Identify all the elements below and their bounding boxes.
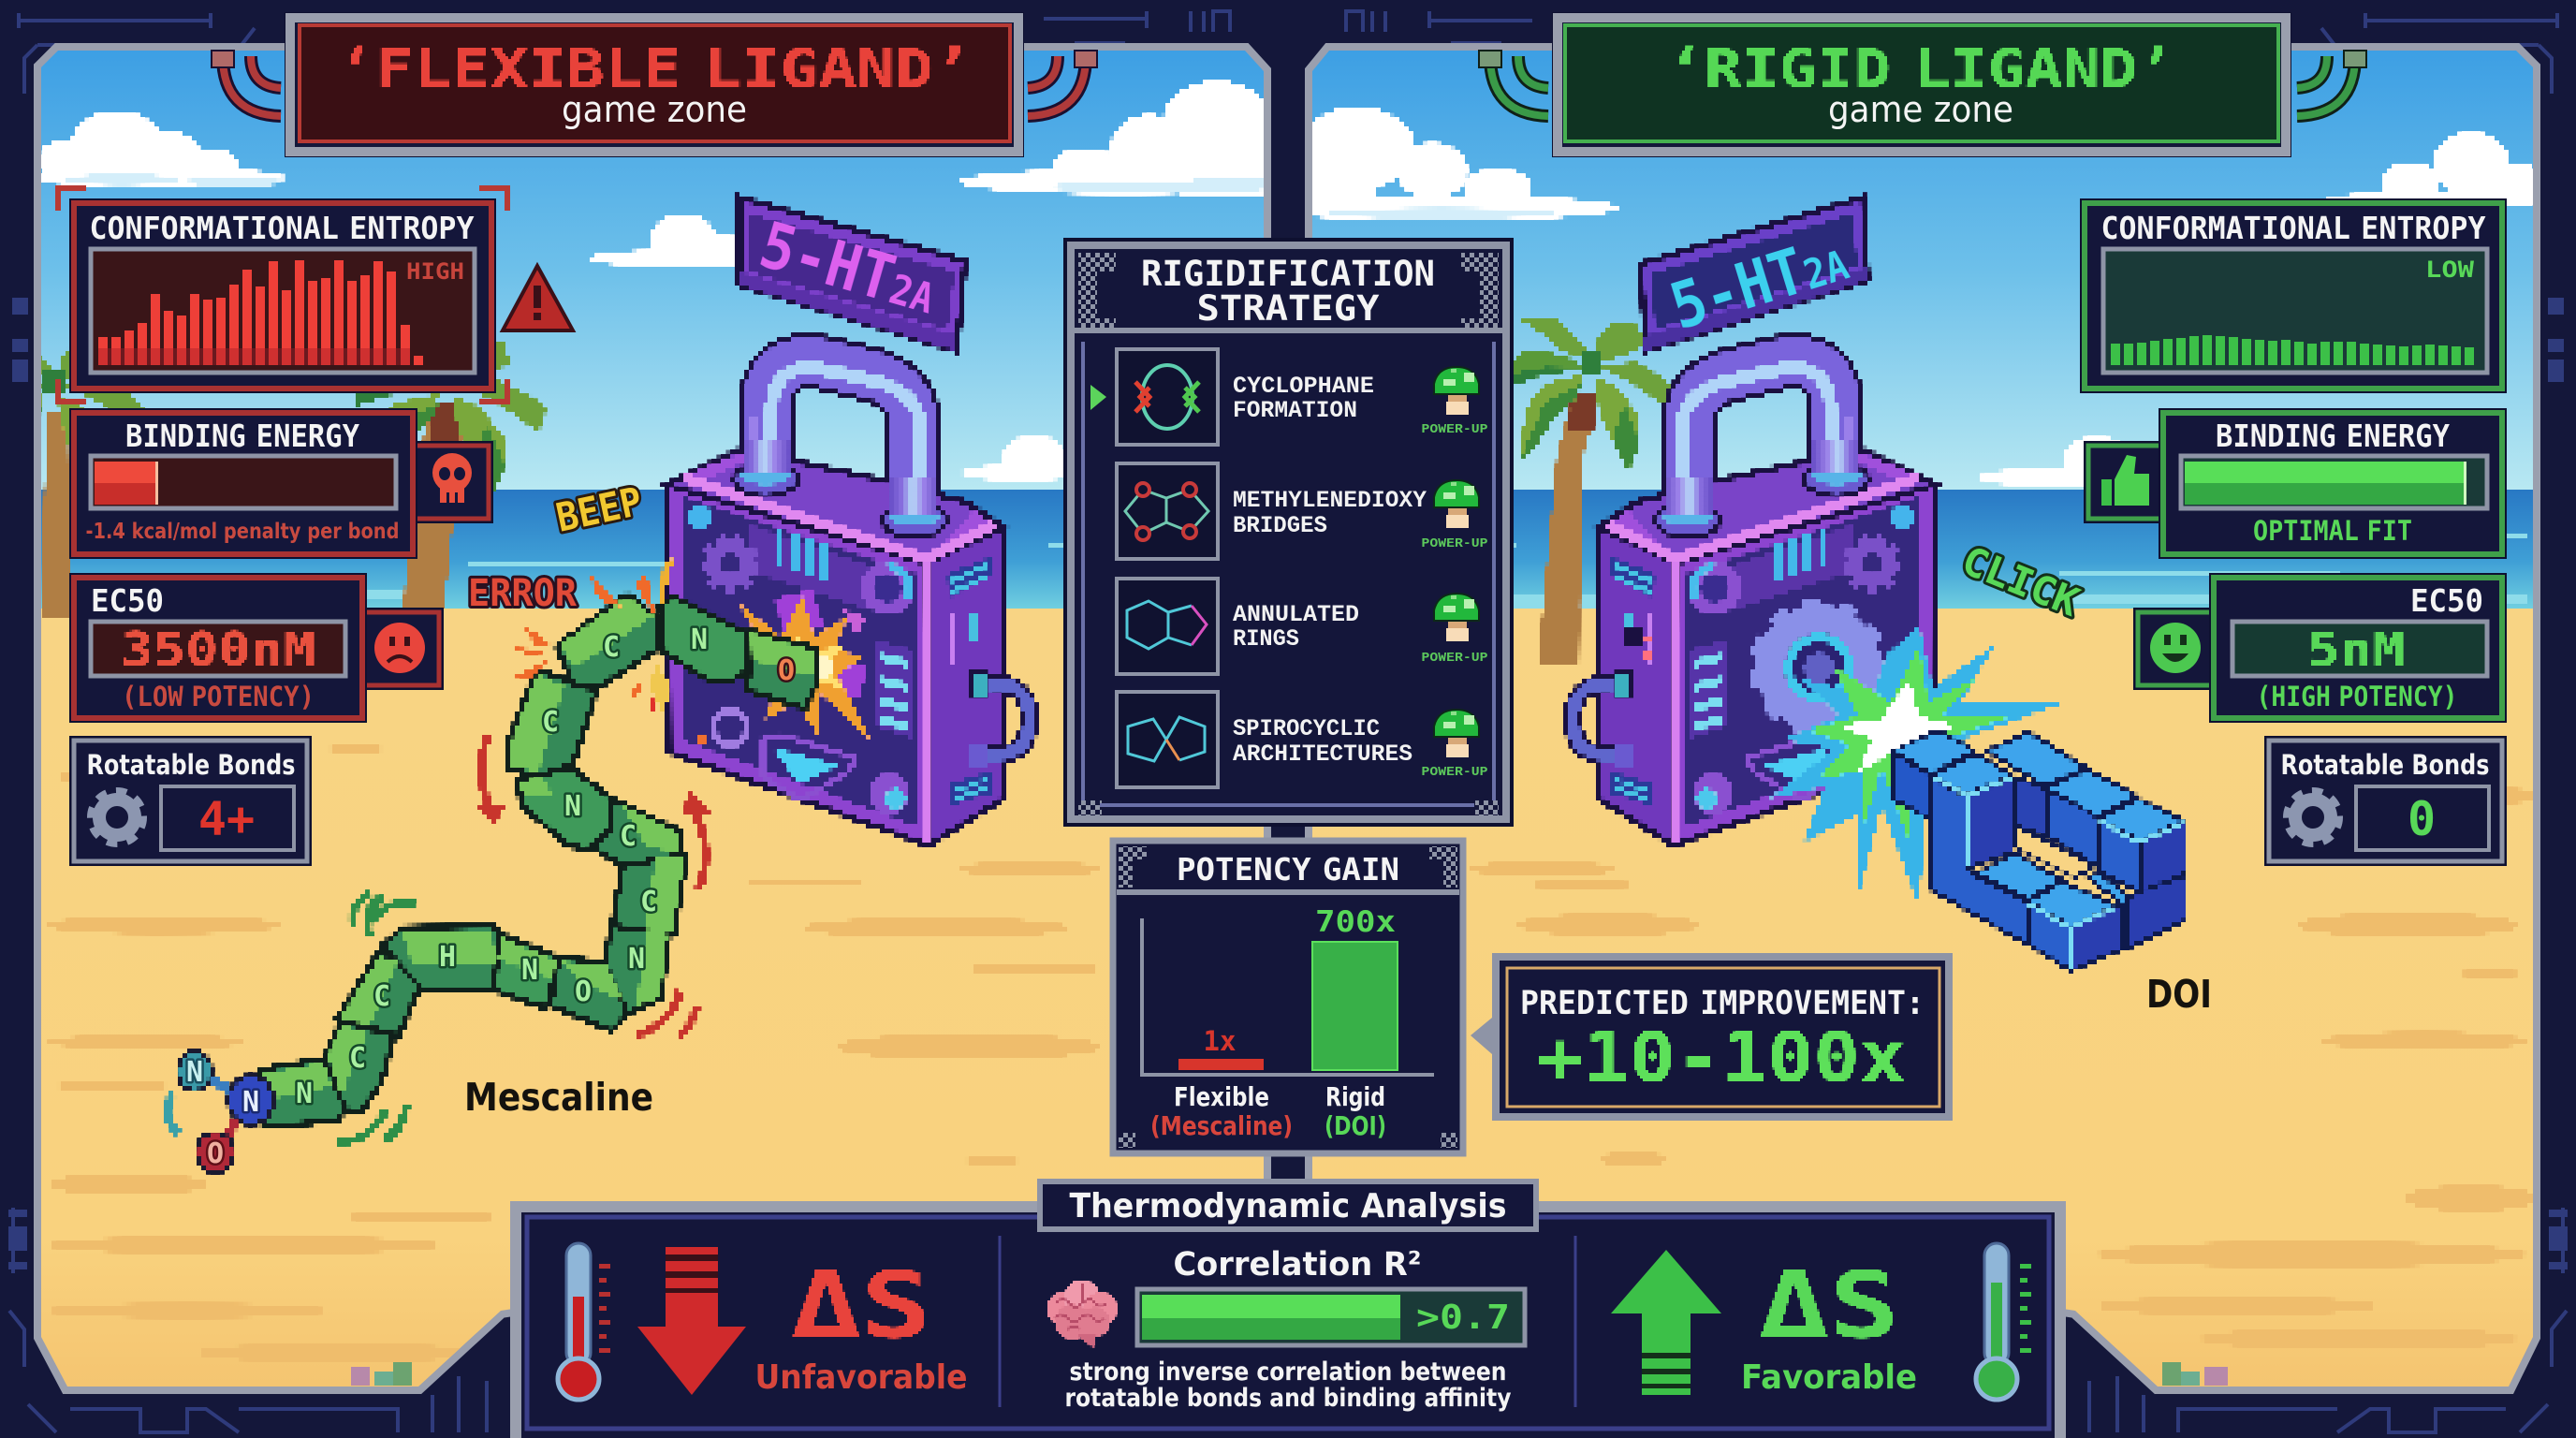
icon: gear [92, 792, 142, 843]
sand streaks [1470, 788, 2537, 1350]
correlation block [1046, 1246, 1525, 1413]
callout: predicted improvement: PREDICTED IMPROVEMENT: [1520, 985, 1925, 1022]
panel: rotatable bonds flexible: 4+ [198, 792, 255, 846]
entropy chart high [91, 249, 475, 373]
entropy chart high: HIGH [406, 258, 464, 285]
cables right header [1479, 51, 2366, 116]
panel: EC50 flexible: EC50 [91, 582, 164, 619]
lock right [1573, 360, 1935, 845]
item: spirocyclic architectures: ARCHITECTURES [1233, 741, 1412, 768]
molecule letters: N [691, 624, 708, 656]
thermometer red [558, 1243, 610, 1400]
flexible title: ‘FLEXIBLE LIGAND’ [337, 38, 972, 100]
icon: warning triangle [503, 266, 573, 330]
icon box: thumbs up [2084, 441, 2167, 523]
molecule letters: O [575, 976, 592, 1008]
sand streaks [47, 744, 1101, 1362]
molecule letters: N [628, 943, 645, 976]
EC50 value rigid [2232, 622, 2487, 677]
item: cyclophane formation: POWER-UP [1421, 422, 1488, 437]
correlation bar: >0.7 [1416, 1299, 1510, 1337]
right window frame [1312, 51, 2533, 1387]
correlation block: Correlation R² [1174, 1246, 1421, 1284]
left window frame [41, 51, 1264, 1387]
clouds right [1264, 107, 2542, 487]
panel: EC50 rigid [2209, 573, 2507, 723]
panel: conformational entropy rigid [2080, 198, 2507, 393]
thermometer green [1976, 1243, 2031, 1400]
panel: binding energy flexible: -1.4 kcal/mol penalty per bond [86, 520, 399, 544]
molecule letters [186, 624, 795, 1170]
entropy chart low [2103, 249, 2487, 373]
item: methylenedioxy bridges: POWER-UP [1421, 536, 1488, 551]
EC50 value flexible [91, 622, 345, 677]
header: rigid ligand [1552, 12, 2291, 157]
selector arrow [1090, 385, 1106, 410]
clouds left [33, 81, 1287, 483]
molecule letters: O [207, 1137, 224, 1170]
item: methylenedioxy bridges [1117, 463, 1488, 559]
entropy up text [1741, 1253, 1917, 1397]
item: annulated rings: RINGS [1233, 625, 1299, 653]
arrow up green [1611, 1250, 1721, 1395]
EC50 value flexible: 3500nM [121, 623, 315, 677]
item: spirocyclic architectures: SPIROCYCLIC [1233, 715, 1380, 742]
flexible subtitle: game zone [562, 89, 747, 130]
molecule letters: N [186, 1056, 203, 1089]
sign text right: 5-HT2A [1662, 222, 1856, 345]
icon box: happy face [2133, 608, 2217, 690]
molecule letters: N [521, 954, 538, 987]
icon: gear rigid [2288, 792, 2338, 843]
strategy heading: STRATEGY [1196, 288, 1380, 329]
item: spirocyclic architectures: POWER-UP [1421, 765, 1488, 780]
item: cyclophane formation [1117, 349, 1488, 445]
sign text left: 5-HT2A [752, 208, 945, 329]
bar chart: potency: (DOI) [1325, 1110, 1386, 1141]
panel: EC50 rigid: EC50 [2410, 582, 2483, 619]
corner blocks left [349, 1363, 414, 1386]
entropy up text: Favorable [1741, 1358, 1917, 1397]
panel: potency gain [1113, 841, 1463, 1153]
gear in lock [1755, 604, 1882, 731]
collision sparks [515, 557, 674, 721]
sea shimmer [41, 522, 1264, 599]
DOI rigid block [1893, 730, 2186, 971]
palm left small [0, 335, 147, 618]
molecule flexible chain [258, 594, 817, 1127]
panel: rotatable bonds rigid: 0 [2408, 792, 2436, 846]
molecule letters: H [439, 941, 456, 974]
molecule letters: C [542, 706, 559, 739]
panel: conformational entropy rigid: CONFORMATIONAL ENTROPY [2100, 210, 2486, 246]
molecule letters: C [603, 631, 620, 664]
BEEP label: BEEP [552, 478, 646, 541]
panel: rotatable bonds flexible: Rotatable Bonds [86, 749, 296, 781]
lock right LEDs [1625, 629, 1650, 660]
ERROR label: ERROR [468, 572, 578, 615]
correlation bar [1137, 1289, 1525, 1345]
panel: rotatable bonds rigid: Rotatable Bonds [2280, 749, 2490, 781]
panel: binding energy rigid: OPTIMAL FIT [2253, 515, 2412, 547]
entropy down text [754, 1253, 968, 1397]
molecule letters: N [296, 1078, 313, 1110]
palm right [1510, 318, 1676, 665]
bar chart: potency: 1x [1204, 1025, 1236, 1057]
icon: brain [1046, 1280, 1118, 1348]
bar chart: potency [1142, 905, 1434, 1141]
panel: conformational entropy flexible [58, 188, 507, 402]
strategy heading [1141, 254, 1435, 329]
panel: EC50 rigid: (HIGH POTENCY) [2256, 681, 2458, 712]
item: methylenedioxy bridges: METHYLENEDIOXY [1233, 487, 1427, 514]
molecule letters: N [242, 1086, 259, 1119]
arrow down red [637, 1247, 746, 1395]
binding bar flexible [91, 456, 396, 508]
correlation block: strong inverse correlation between [1069, 1357, 1507, 1387]
item: annulated rings: ANNULATED [1233, 601, 1359, 628]
molecule letters: O [778, 654, 795, 687]
DOI label: DOI [2146, 972, 2212, 1017]
sign left [739, 198, 965, 351]
panel: EC50 flexible: (LOW POTENCY) [122, 681, 315, 712]
molecule letters: C [349, 1042, 366, 1075]
section title tab: Thermodynamic Analysis [1069, 1187, 1507, 1225]
molecule letters: N [564, 790, 581, 823]
strategy heading: RIGIDIFICATION [1141, 254, 1435, 294]
molecule letters: C [640, 886, 657, 918]
item: cyclophane formation: CYCLOPHANE [1233, 373, 1374, 400]
header: flexible ligand [285, 12, 1024, 157]
panel: binding energy flexible [69, 408, 417, 559]
bar chart: potency: Rigid [1325, 1081, 1385, 1112]
rigid subtitle: game zone [1828, 89, 2013, 130]
left beach scene [0, 51, 1310, 1404]
item: annulated rings: POWER-UP [1421, 651, 1488, 666]
CLICK label: CLICK [1955, 537, 2086, 625]
panel: potency gain: POTENCY GAIN [1177, 851, 1399, 888]
panel: conformational entropy flexible: CONFORMATIONAL ENTROPY [90, 210, 475, 246]
entropy chart low: LOW [2425, 257, 2475, 283]
binding bar rigid [2181, 456, 2487, 508]
panel: EC50 flexible [69, 573, 367, 723]
Mescaline label: Mescaline [464, 1075, 653, 1120]
EC50 value rigid: 5nM [2307, 623, 2405, 677]
item: annulated rings [1117, 579, 1488, 674]
panel: thermodynamic analysis [516, 1181, 2060, 1438]
item: methylenedioxy bridges: BRIDGES [1233, 512, 1327, 539]
right side chips [2548, 298, 2568, 1269]
atom nodes [178, 1051, 273, 1172]
entropy up text: ΔS [1759, 1253, 1899, 1359]
bar chart: potency: 700x [1315, 905, 1396, 939]
molecule letters: C [373, 980, 390, 1013]
icon box: skull [408, 441, 493, 523]
lock damage [695, 590, 871, 746]
panel: binding energy rigid [2159, 408, 2507, 559]
right beach scene [1264, 51, 2576, 1404]
icon box: sad face [359, 608, 444, 690]
molecule letters: C [620, 820, 637, 853]
bar chart: potency: Flexible [1174, 1081, 1269, 1112]
correlation block: rotatable bonds and binding affinity [1065, 1384, 1512, 1413]
sign right [1641, 198, 1867, 351]
entropy down text: ΔS [791, 1253, 931, 1359]
panel: binding energy flexible: BINDING ENERGY [125, 418, 359, 454]
panel: rotatable bonds flexible [69, 736, 312, 866]
palm left large [356, 335, 546, 609]
callout: predicted improvement [1471, 953, 1953, 1121]
entropy down text: Unfavorable [754, 1358, 968, 1397]
panel: rotatable bonds rigid [2264, 736, 2507, 866]
rigid title: ‘RIGID LIGAND’ [1667, 38, 2174, 100]
item: cyclophane formation: FORMATION [1233, 397, 1357, 424]
sea shimmer [1312, 534, 2527, 607]
lock left [667, 360, 1030, 845]
click spark [1769, 624, 2062, 905]
panel: rigidification strategy [1065, 240, 1512, 825]
motion arcs [168, 735, 706, 1142]
corner blocks right [2160, 1363, 2227, 1386]
bar chart: potency: (Mescaline) [1150, 1110, 1293, 1141]
callout: predicted improvement: +10-100x [1537, 1018, 1906, 1098]
left side chips [8, 298, 28, 1269]
panel: binding energy rigid: BINDING ENERGY [2216, 418, 2450, 454]
cables left header [212, 51, 1097, 116]
item: spirocyclic architectures [1117, 692, 1488, 787]
